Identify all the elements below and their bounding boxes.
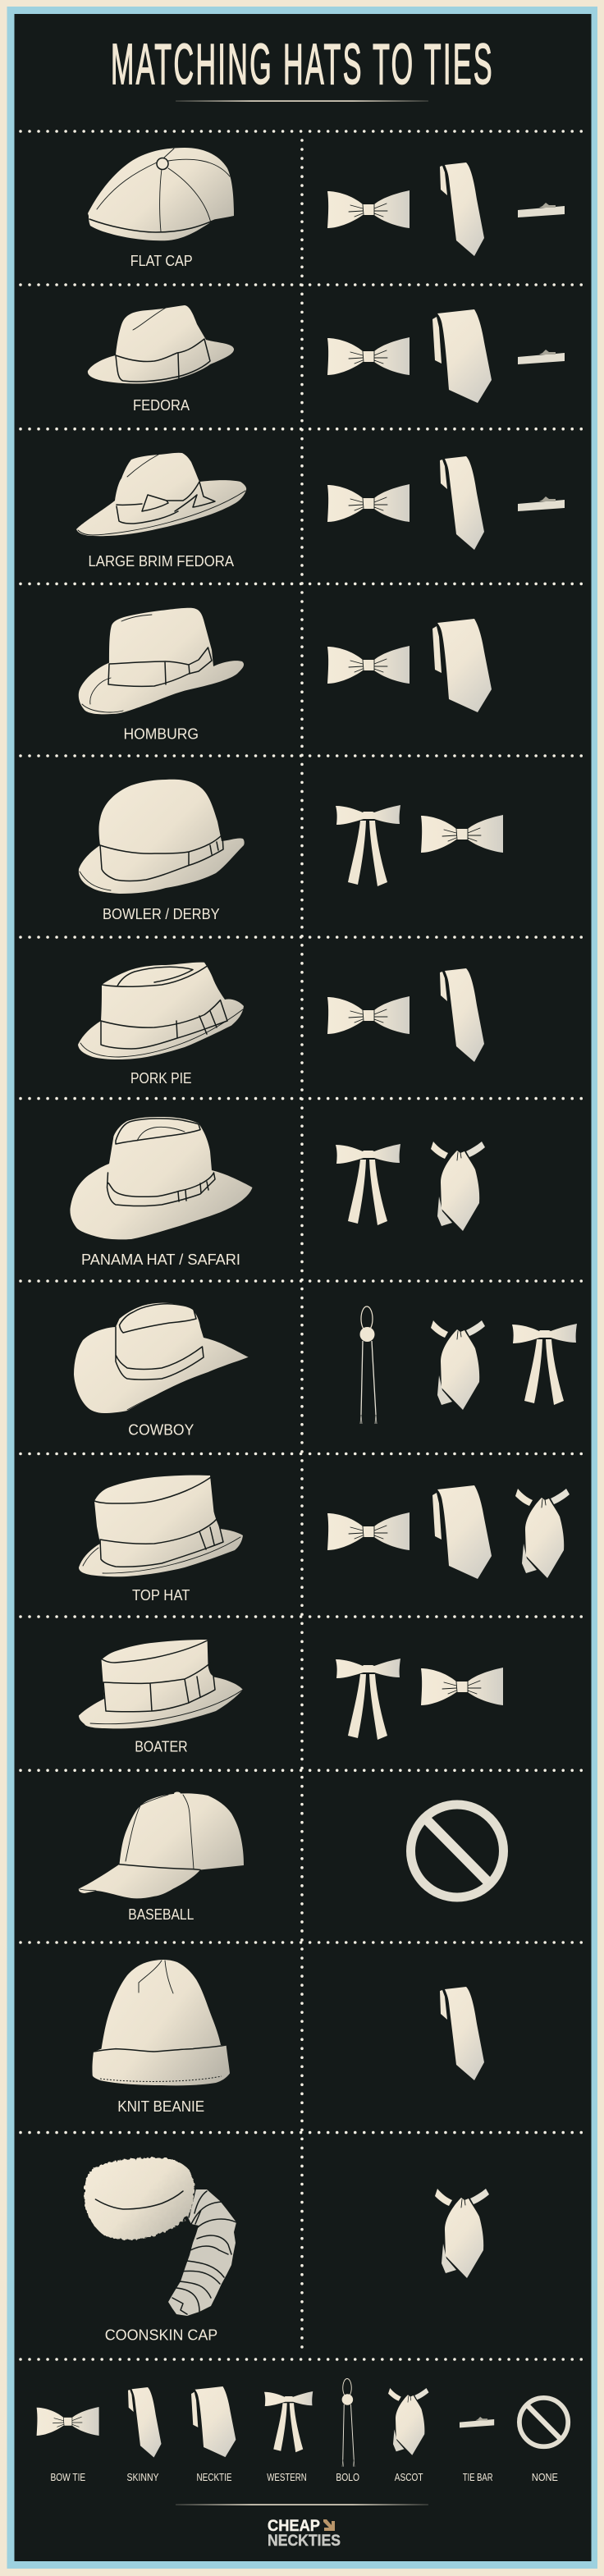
hat: flat cap: [88, 148, 234, 240]
bow tie: [421, 815, 503, 853]
legend label: necktie: NECKTIE: [197, 2472, 231, 2483]
hat: large brim fedora: [76, 453, 246, 536]
hat label: pork pie: PORK PIE: [130, 1070, 192, 1087]
legend label: skinny: SKINNY: [126, 2472, 159, 2483]
legend icon: skinny: [128, 2387, 161, 2457]
logo word: cheap: CHEAP: [268, 2517, 320, 2535]
western tie: [512, 1324, 577, 1405]
ascot: [435, 2189, 489, 2278]
hat label: homburg: HOMBURG: [123, 726, 199, 743]
no tie symbol: [410, 1805, 504, 1897]
western tie: [336, 1659, 400, 1740]
bow tie: [327, 996, 410, 1034]
ascot: [431, 1320, 485, 1410]
bow tie: [327, 484, 410, 522]
legend label: bolo: BOLO: [336, 2472, 359, 2483]
legend label: western: WESTERN: [267, 2472, 307, 2483]
hat label: top hat: TOP HAT: [132, 1587, 190, 1604]
hat label: large brim fedora: LARGE BRIM FEDORA: [89, 553, 234, 570]
hat: top hat: [79, 1476, 243, 1576]
row: fedora: [88, 305, 565, 414]
hat: pork pie: [78, 963, 244, 1059]
logo: cheap neckties: [268, 2517, 341, 2550]
row: cowboy: [74, 1303, 577, 1438]
logo word: neckties: NECKTIES: [268, 2532, 341, 2550]
legend label: bow tie: BOW TIE: [51, 2472, 85, 2483]
legend: [37, 2378, 568, 2483]
hat: cowboy: [74, 1303, 249, 1413]
hat: boater: [79, 1640, 243, 1728]
legend icon: western: [264, 2391, 313, 2452]
hat label: panama: PANAMA HAT / SAFARI: [81, 1251, 240, 1268]
bow tie: [327, 190, 410, 228]
tie bar: [518, 496, 565, 511]
row: pork pie: [78, 963, 484, 1087]
bolo tie: [359, 1306, 377, 1424]
hat label: cowboy: COWBOY: [128, 1421, 194, 1438]
hat label: fedora: FEDORA: [133, 397, 190, 414]
row: boater: [79, 1640, 503, 1755]
row: knit beanie: [92, 1960, 484, 2115]
row: panama: [70, 1117, 485, 1268]
hat: coonskin cap: [85, 2157, 236, 2316]
legend label: none: NONE: [532, 2472, 558, 2483]
bow tie: [421, 1668, 503, 1705]
legend label: tie bar: TIE BAR: [463, 2472, 492, 2483]
legend icon: bow tie: [37, 2407, 99, 2436]
ascot: [515, 1489, 570, 1578]
hat: bowler: [79, 780, 245, 894]
necktie: [432, 619, 492, 712]
hat: panama: [70, 1117, 253, 1239]
row: coonskin cap: [85, 2157, 489, 2344]
bow tie: [327, 646, 410, 684]
row: top hat: [79, 1476, 570, 1604]
tie bar: [518, 203, 565, 217]
legend icon: bolo: [342, 2378, 355, 2467]
skinny tie: [440, 968, 484, 1062]
necktie: [432, 309, 492, 403]
row: flat cap: [88, 148, 565, 269]
legend label: ascot: ASCOT: [395, 2472, 423, 2483]
row: bowler: [79, 780, 503, 922]
hat label: flat cap: FLAT CAP: [130, 253, 193, 269]
skinny tie: [440, 456, 484, 550]
ascot: [431, 1142, 485, 1231]
bow tie: [327, 1512, 410, 1550]
tie bar: [518, 350, 565, 364]
western tie: [336, 805, 400, 886]
legend icon: none: [519, 2398, 568, 2446]
hat: fedora: [88, 305, 234, 384]
necktie: [432, 1485, 492, 1579]
legend icon: tie bar: [460, 2417, 494, 2427]
skinny tie: [440, 162, 484, 256]
hat label: baseball: BASEBALL: [128, 1906, 194, 1923]
logo arrow: [323, 2519, 335, 2531]
row: homburg: [79, 608, 492, 743]
hat label: bowler: BOWLER / DERBY: [103, 906, 220, 922]
row: large brim fedora: [76, 453, 565, 570]
legend icon: necktie: [191, 2386, 236, 2457]
legend icon: ascot: [388, 2388, 428, 2455]
western tie: [336, 1144, 400, 1225]
hat label: knit beanie: KNIT BEANIE: [117, 2098, 204, 2115]
hat: homburg: [79, 608, 244, 714]
row: baseball: [79, 1792, 503, 1923]
bow tie: [327, 337, 410, 375]
hat: knit beanie: [92, 1960, 230, 2085]
hat label: boater: BOATER: [135, 1738, 188, 1755]
hat label: coonskin cap: COONSKIN CAP: [105, 2327, 217, 2344]
hat: baseball: [79, 1792, 244, 1898]
skinny tie: [440, 1987, 484, 2080]
